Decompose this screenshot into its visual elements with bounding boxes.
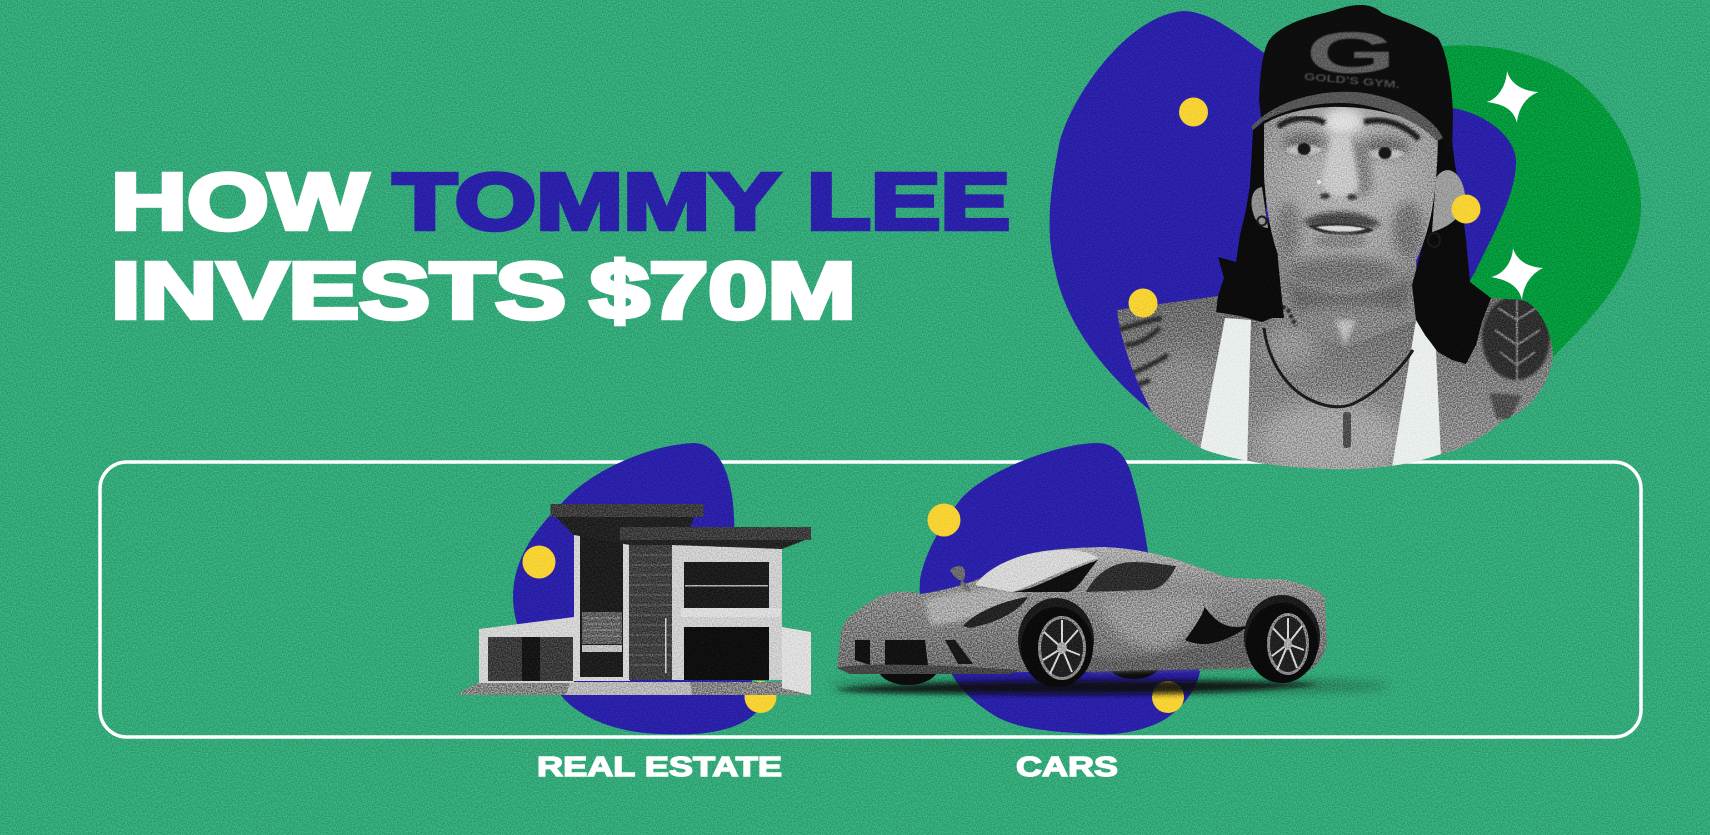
roof soffit <box>626 540 805 549</box>
title line 1 word: HOW: HOW <box>111 157 369 246</box>
second roof <box>620 527 811 540</box>
side mirror <box>950 566 972 592</box>
dot: upper left <box>1179 98 1208 126</box>
side door <box>522 637 540 681</box>
white block <box>672 545 782 680</box>
sports car <box>837 547 1327 687</box>
eyes <box>1298 143 1310 155</box>
lower lip <box>1313 234 1367 248</box>
dot: cars bottom <box>1152 681 1184 713</box>
far front tire <box>878 651 938 685</box>
cap <box>1259 5 1453 158</box>
cap brim <box>1251 92 1443 141</box>
cheek shade <box>1276 202 1300 258</box>
real estate item <box>456 443 811 782</box>
dot: shoulder <box>1128 288 1158 318</box>
cars item <box>830 443 1390 782</box>
blob: blue backdrop <box>1050 11 1516 412</box>
label: real estate: REAL ESTATE <box>537 751 782 782</box>
eye sockets <box>1282 133 1326 153</box>
garage door <box>488 637 573 681</box>
dot: cars left <box>928 504 960 536</box>
shoulder tattoo right <box>1482 296 1550 420</box>
tower frame <box>574 523 630 681</box>
dot: real estate bottom <box>744 681 776 713</box>
torso <box>1117 296 1553 470</box>
eye whites <box>1286 145 1322 155</box>
front steps <box>566 682 692 695</box>
title line 1 name: TOMMY LEE: TOMMY LEE <box>393 157 1010 246</box>
moustache <box>1302 212 1382 228</box>
icon: sparkle lower <box>1491 248 1543 300</box>
under roof <box>556 517 694 545</box>
roof highlight <box>975 550 1098 592</box>
headlight <box>963 597 1028 628</box>
side window <box>1086 562 1176 592</box>
far rear tire <box>1108 649 1160 679</box>
dot: real estate left <box>522 546 556 578</box>
house <box>456 504 811 695</box>
neck tattoo <box>1272 300 1296 326</box>
garage opening <box>684 627 769 680</box>
front grille <box>855 640 928 665</box>
mouth <box>1308 223 1374 236</box>
cap logo: G <box>1306 21 1396 86</box>
nose piercing <box>1317 180 1321 184</box>
title line 2 amount: $70M: $70M <box>590 246 856 335</box>
hood highlight <box>925 590 1025 625</box>
neck hollow <box>1335 320 1356 345</box>
eyebrows <box>1278 118 1325 127</box>
photo: Tommy Lee <box>1100 5 1570 480</box>
staircase <box>582 612 622 652</box>
blob: cars <box>920 443 1200 734</box>
necklace pendant <box>1343 412 1351 448</box>
front wheel rim <box>1038 616 1086 680</box>
rear wheel rim <box>1267 613 1309 675</box>
title line 2 word: INVESTS: INVESTS <box>111 246 566 335</box>
dot: right of head <box>1452 194 1480 224</box>
ear left <box>1251 187 1268 228</box>
face <box>1264 106 1438 294</box>
necklace <box>1264 328 1413 407</box>
nose shadow <box>1352 135 1372 200</box>
portrait group <box>1050 5 1641 480</box>
cap text: GOLD'S GYM. <box>1304 72 1400 91</box>
forehead highlight <box>1323 108 1363 136</box>
car shadow <box>835 681 1320 694</box>
upper window <box>684 562 769 608</box>
neck <box>1268 255 1418 348</box>
earring right <box>1428 233 1440 247</box>
ground plane <box>456 682 811 695</box>
top roof <box>550 504 704 517</box>
balcony rail <box>685 585 768 586</box>
teeth <box>1316 226 1366 232</box>
blob: real estate <box>513 443 760 734</box>
door sculpt light <box>1100 594 1215 648</box>
door scoop <box>1185 605 1250 644</box>
front splitter <box>837 665 1020 674</box>
rear wheel arch <box>1244 595 1320 679</box>
nose <box>1322 135 1358 196</box>
panel: investments outline <box>100 462 1641 737</box>
earring left <box>1258 216 1266 226</box>
neck shadow <box>1285 275 1412 312</box>
balcony ledge <box>681 608 781 617</box>
tank top straps <box>1200 318 1251 468</box>
hair left <box>1216 120 1284 322</box>
front wheel tire <box>1021 607 1093 687</box>
right wall <box>782 627 811 695</box>
ear right <box>1432 170 1465 232</box>
wood cladding <box>629 545 672 680</box>
title <box>111 157 1010 335</box>
label: cars: CARS <box>1016 751 1118 782</box>
tattoo leaf veins <box>1495 300 1540 380</box>
rear wheel tire <box>1246 603 1318 683</box>
car soft shadow <box>830 679 1390 693</box>
sill shadow <box>1085 625 1255 672</box>
side intake <box>945 640 973 664</box>
front wheel arch <box>1018 598 1094 682</box>
stubble chin <box>1287 257 1397 287</box>
car body <box>837 547 1327 673</box>
garage wall <box>479 617 574 683</box>
hair right <box>1412 130 1491 364</box>
shoulder tattoo left <box>1118 318 1168 388</box>
chest shading <box>1260 400 1400 480</box>
tower glass <box>580 530 623 677</box>
blob: green backdrop <box>1420 45 1641 400</box>
icon: sparkle upper <box>1486 71 1538 123</box>
windshield <box>1012 560 1098 592</box>
